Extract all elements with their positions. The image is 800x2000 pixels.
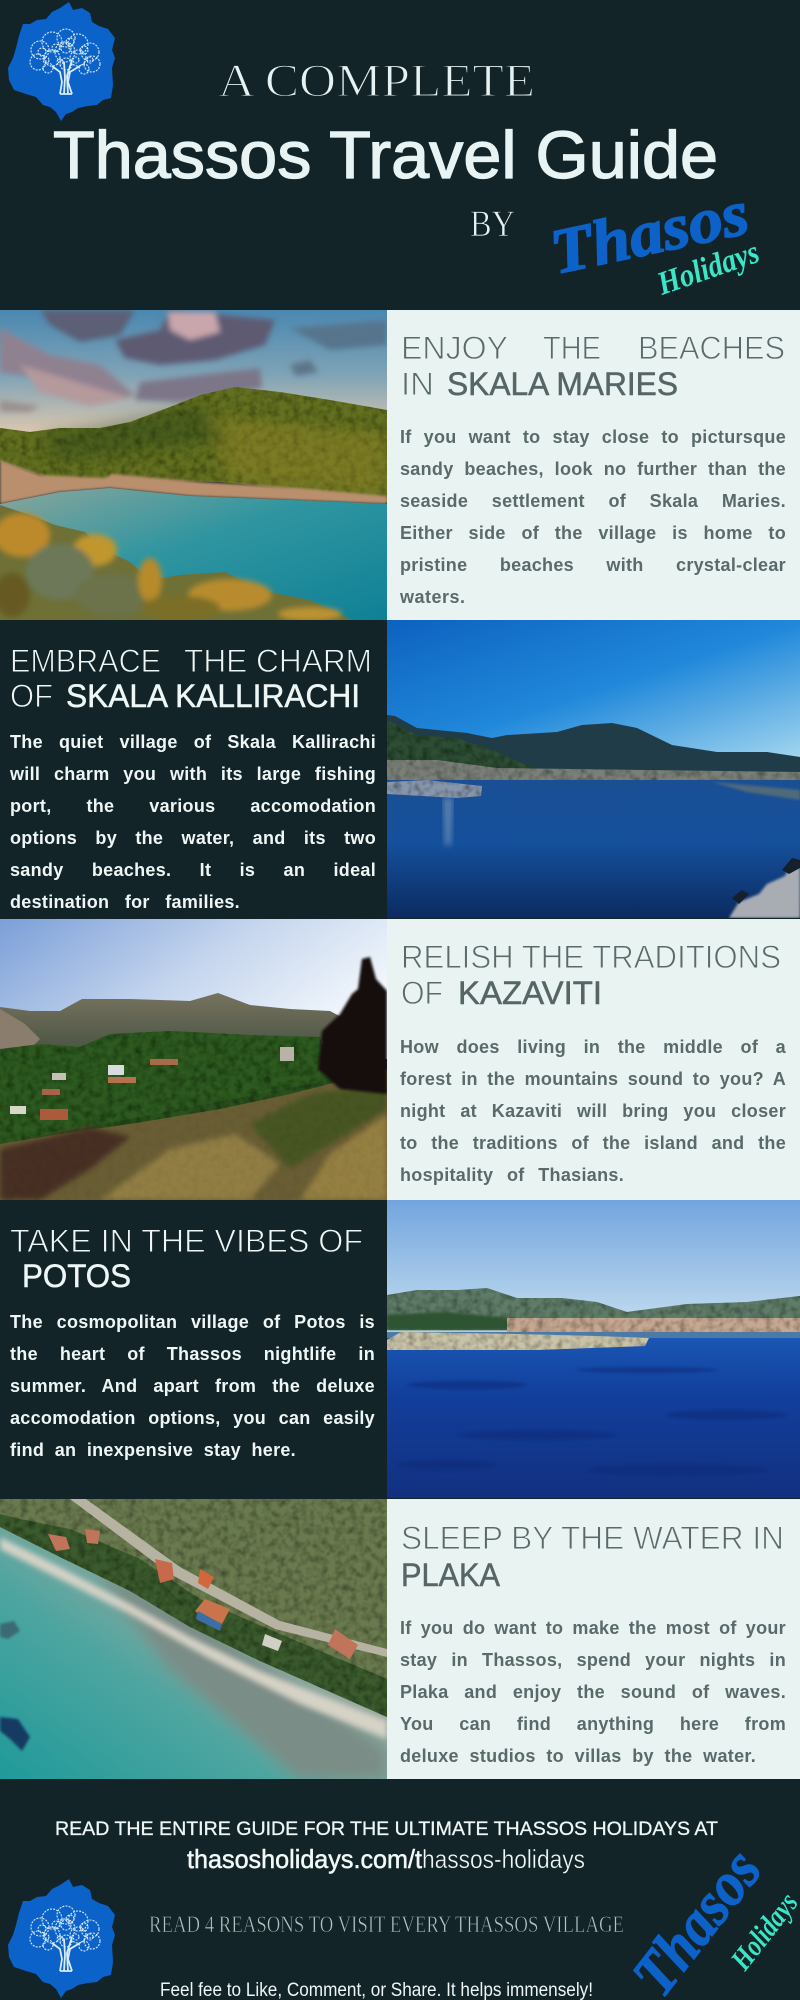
- heading: Embrace the charm of Skala Kallirachi: EMBRACE: [10, 643, 161, 679]
- logo: Thasos Holidays wordmark: Holidays: [652, 234, 764, 303]
- photo: Skala Kallirachi harbour: [387, 620, 800, 918]
- footer banner: [8, 1819, 800, 2000]
- text: Skala Maries description: Either side of the village is home to: [400, 523, 786, 543]
- heading: Relish the traditions of Kazaviti: OF: [401, 975, 443, 1011]
- title: Thassos Travel Guide: Thassos Travel Guide: [53, 118, 718, 193]
- header banner: [8, 2, 764, 303]
- text: Kazaviti description: How does living in the middle of a: [400, 1037, 786, 1057]
- section: Skala Maries: [0, 310, 800, 620]
- heading: Take in the vibes of Potos: POTOS: [22, 1258, 131, 1294]
- heading: Embrace the charm of Skala Kallirachi: SKALA KALLIRACHI: [66, 678, 360, 714]
- text: Potos description: [10, 1312, 375, 1460]
- text: Skala Maries description: pristine beaches with crystal-clear: [400, 555, 786, 575]
- text: Skala Kallirachi description: will charm you with its large fishing: [10, 764, 376, 784]
- text: Plaka description: If you do want to make the most of your: [400, 1618, 786, 1638]
- text: website address: [187, 1844, 585, 1874]
- heading: Embrace the charm of Skala Kallirachi: [10, 643, 372, 714]
- text: Kazaviti description: night at Kazaviti will bring you closer: [400, 1101, 786, 1121]
- heading: Sleep by the water in Plaka: [401, 1520, 784, 1593]
- text: Skala Kallirachi description: options by the water, and its two: [10, 828, 376, 848]
- text: Potos description: accomodation options, you can easily: [10, 1408, 375, 1428]
- text: read the entire guide call to action: READ THE ENTIRE GUIDE FOR THE ULTIMATE THASSOS HOLIDAYS AT: [55, 1819, 718, 1840]
- heading: Sleep by the water in Plaka: PLAKA: [401, 1557, 501, 1593]
- section: Skala Kallirachi: [10, 620, 800, 918]
- text: Skala Kallirachi description: port, the various accomodation: [10, 796, 376, 816]
- text: Kazaviti description: to the traditions of the island and the: [400, 1133, 786, 1153]
- icon: Thassos island logo with olive tree: [8, 2, 115, 121]
- text: Plaka description: You can find anything here from: [400, 1714, 786, 1734]
- text: Plaka description: [400, 1618, 786, 1766]
- text: Kazaviti description: [400, 1037, 786, 1185]
- text: Plaka description: stay in Thassos, spend your nights in: [400, 1650, 786, 1670]
- section: Plaka: [0, 1499, 800, 1779]
- logo: Thasos Holidays wordmark: Thasos: [544, 177, 755, 288]
- heading: Enjoy the beaches in Skala Maries: [401, 330, 785, 402]
- title: A COMPLETE: A COMPLETE: [218, 55, 535, 107]
- text: Potos description: the heart of Thassos nightlife in: [10, 1344, 375, 1364]
- text: Kazaviti description: forest in the mountains sound to you? A: [400, 1069, 786, 1089]
- text: Skala Maries description: sandy beaches, look no further than the: [400, 459, 786, 479]
- text: website address: hassos-holidays: [422, 1844, 585, 1874]
- panel: Potos text: [0, 1200, 387, 1498]
- heading: Enjoy the beaches in Skala Maries: IN: [401, 366, 434, 402]
- text: Plaka description: Plaka and enjoy the sound of waves.: [400, 1682, 786, 1702]
- section: Kazaviti: [0, 919, 800, 1200]
- text: Skala Maries description: waters.: [400, 587, 466, 607]
- text: Plaka description: deluxe studios to villas by the water.: [400, 1746, 756, 1766]
- text: Skala Maries description: [400, 427, 786, 607]
- heading: Embrace the charm of Skala Kallirachi: OF: [10, 678, 53, 714]
- text: Skala Kallirachi description: [10, 732, 376, 912]
- photo: Kazaviti mountain village: [0, 919, 387, 1200]
- text: Skala Maries description: If you want to stay close to pictursque: [400, 427, 786, 447]
- heading: Embrace the charm of Skala Kallirachi: THE CHARM: [184, 643, 372, 679]
- text: Kazaviti description: hospitality of Thasians.: [400, 1165, 624, 1185]
- heading: Relish the traditions of Kazaviti: [401, 939, 781, 1011]
- heading: Enjoy the beaches in Skala Maries: ENJOY: [401, 330, 508, 366]
- panel: Plaka text: [387, 1499, 800, 1779]
- text: Potos description: The cosmopolitan village of Potos is: [10, 1312, 375, 1332]
- photo: Plaka aerial beach: [0, 1499, 387, 1779]
- heading: Enjoy the beaches in Skala Maries: SKALA MARIES: [447, 366, 678, 402]
- heading: Take in the vibes of Potos: [10, 1223, 363, 1294]
- panel: Kazaviti text: [387, 919, 800, 1200]
- panel: Skala Maries text: [387, 310, 800, 620]
- heading: Sleep by the water in Plaka: SLEEP BY THE WATER IN: [401, 1520, 784, 1556]
- text: Potos description: find an inexpensive stay here.: [10, 1440, 296, 1460]
- heading: Relish the traditions of Kazaviti: RELISH THE TRADITIONS: [401, 939, 781, 975]
- text: Potos description: summer. And apart from the deluxe: [10, 1376, 375, 1396]
- photo: Potos seafront: [387, 1200, 800, 1498]
- panel: Skala Kallirachi text: [0, 620, 387, 918]
- text: Skala Maries description: seaside settlement of Skala Maries.: [400, 491, 786, 511]
- text: read 4 reasons link: READ 4 REASONS TO VISIT EVERY THASSOS VILLAGE: [149, 1912, 624, 1937]
- text: website address: thasosholidays.com/t: [187, 1844, 423, 1874]
- section: Potos: [10, 1200, 800, 1498]
- heading: Take in the vibes of Potos: TAKE IN THE VIBES OF: [10, 1223, 363, 1259]
- photo: Skala Maries bay at sunset: [0, 310, 387, 620]
- text: BY: BY: [470, 204, 515, 245]
- text: Skala Kallirachi description: destination for families.: [10, 892, 240, 912]
- heading: Relish the traditions of Kazaviti: KAZAVITI: [458, 975, 602, 1011]
- heading: Enjoy the beaches in Skala Maries: BEACHES: [638, 330, 785, 366]
- text: Skala Kallirachi description: sandy beaches. It is an ideal: [10, 860, 376, 880]
- icon: Thassos island logo footer: [8, 1879, 115, 1998]
- heading: Enjoy the beaches in Skala Maries: THE: [543, 330, 601, 366]
- text: Skala Kallirachi description: The quiet village of Skala Kallirachi: [10, 732, 376, 752]
